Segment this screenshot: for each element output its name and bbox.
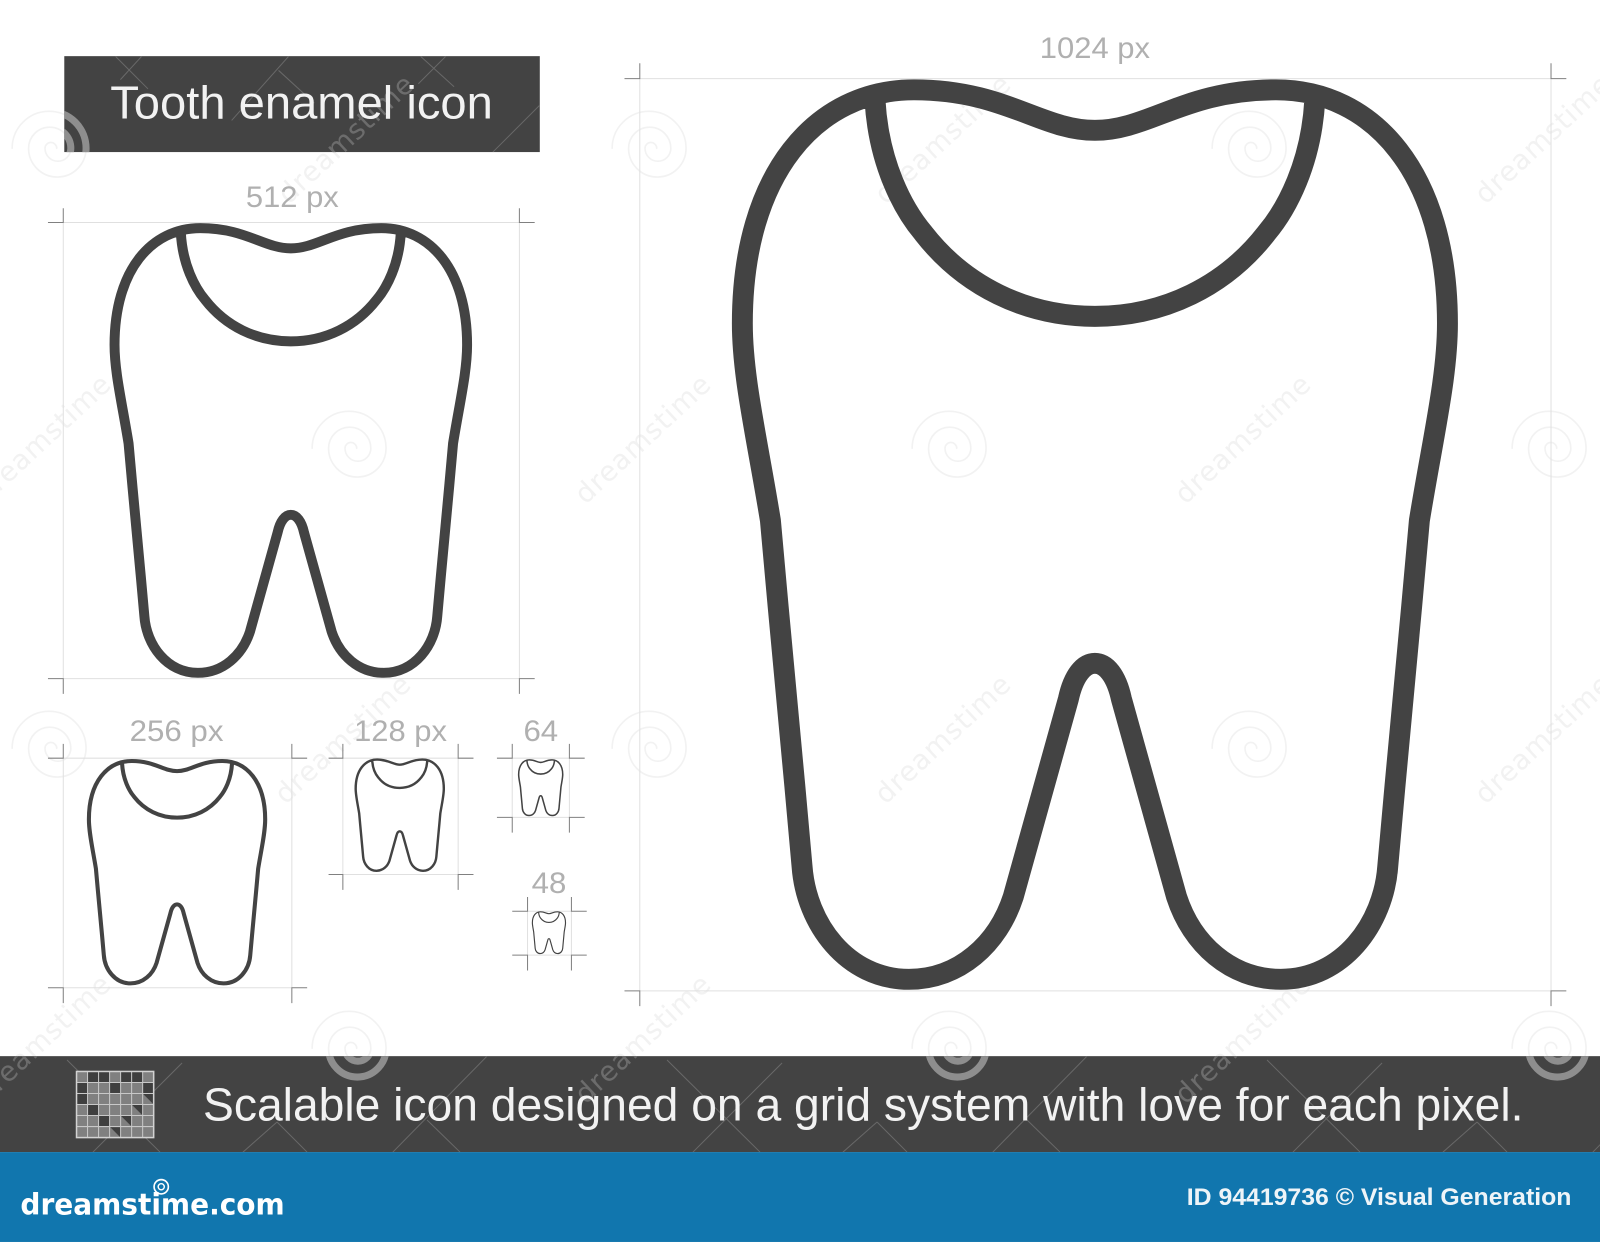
logo: dreamstime.com: dreamstime.com <box>20 1187 285 1221</box>
panel: 64 px tooth <box>497 715 585 833</box>
bottom tagline bar background <box>0 1056 1600 1152</box>
icon: tooth 512 <box>115 228 467 673</box>
label: 512 px: 512 px <box>246 181 339 214</box>
label: 64: 64 <box>523 715 558 748</box>
watermark: spirals and wordmarks on white: dreamstime <box>1168 369 1317 510</box>
label: 48: 48 <box>532 867 566 900</box>
watermark on dark bars: dreamstime <box>568 969 717 1110</box>
icon: tooth 48 <box>532 912 566 954</box>
label: 1024 px: 1024 px <box>1040 32 1150 65</box>
watermark: spirals and wordmarks on white: dreamstime <box>868 669 1017 810</box>
watermark: spirals and wordmarks on white: dreamstime <box>568 969 717 1110</box>
panel: 128 px tooth <box>329 715 473 890</box>
icon: tooth 128 <box>356 760 444 871</box>
watermark: spirals and wordmarks on white: dreamstime <box>268 669 417 810</box>
blue footer <box>0 1152 1600 1242</box>
tagline text: Scalable icon designed on a grid system with love for each pixel. <box>203 1078 1523 1130</box>
watermark: spirals and wordmarks on white: dreamstime <box>868 69 1017 210</box>
watermark on dark bars: dreamstime <box>1168 969 1317 1110</box>
label: 256 px: 256 px <box>130 715 224 748</box>
watermark: spirals and wordmarks on white: dreamstime <box>272 69 420 210</box>
panel: 512 px tooth <box>48 181 535 694</box>
icon: tooth 256 <box>89 761 265 983</box>
icon: tooth 64 <box>519 760 563 816</box>
title text: Tooth enamel icon <box>110 76 493 128</box>
panel: 256 px tooth <box>48 715 307 1003</box>
icon: large tooth <box>742 90 1447 979</box>
watermark: spirals and wordmarks on white: dreamstime <box>1168 969 1317 1110</box>
label: 128 px: 128 px <box>354 715 447 748</box>
image id and credit: ID 94419736 © Visual Generation <box>1187 1184 1571 1211</box>
watermark: spirals and wordmarks on white: dreamstime <box>568 369 717 510</box>
icon: pixel grid <box>77 1071 154 1138</box>
watermark on dark bars: dreamstime <box>272 69 420 210</box>
panel: 48 px tooth <box>512 867 587 970</box>
title banner background <box>64 56 540 152</box>
